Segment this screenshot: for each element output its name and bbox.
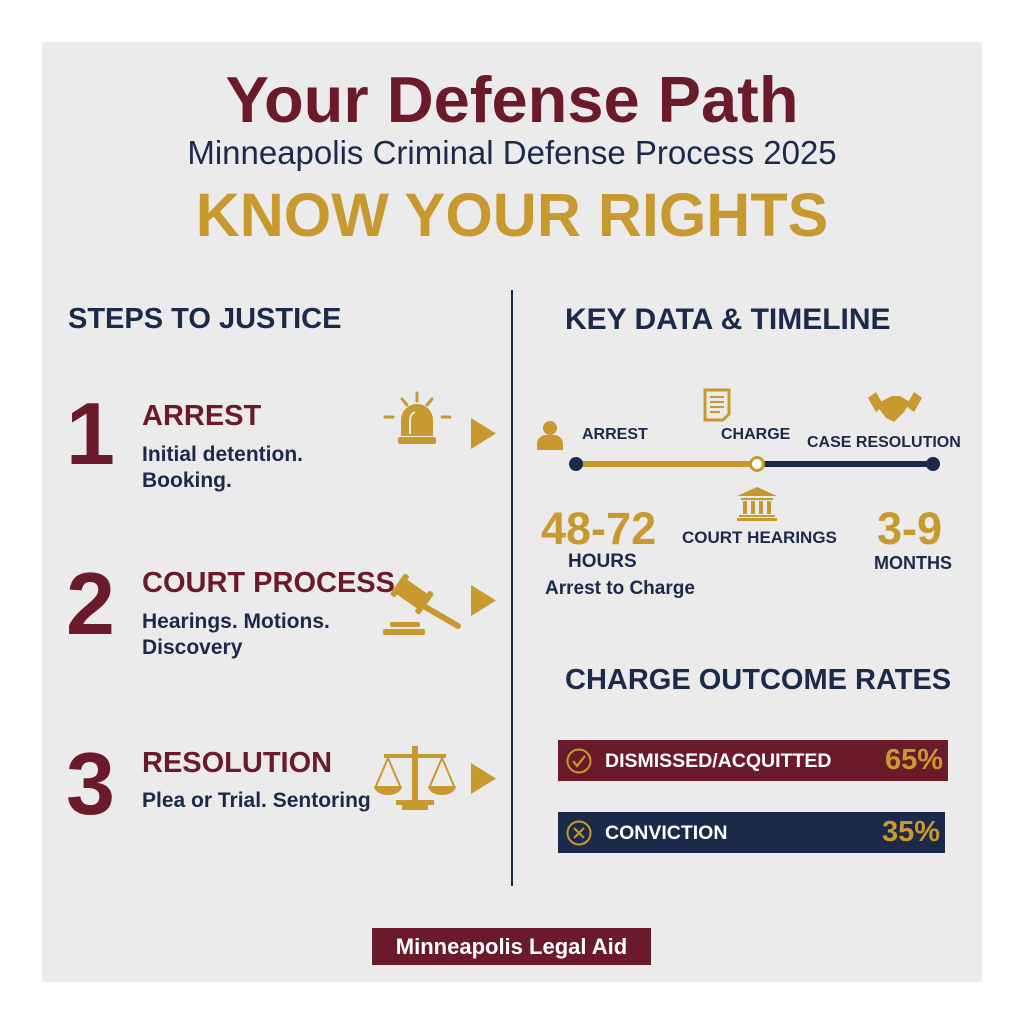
label court hearings: COURT HEARINGS <box>682 528 837 547</box>
step text: Hearings. Motions. <box>142 610 330 633</box>
heading: key data: KEY DATA & TIMELINE <box>565 303 891 336</box>
icon: person <box>537 421 563 450</box>
icon: siren <box>384 392 452 444</box>
heading: steps to justice: STEPS TO JUSTICE <box>68 303 341 335</box>
icon: courthouse <box>737 487 777 521</box>
step text <box>142 610 330 659</box>
bar: dismissed: 65% <box>885 744 943 776</box>
arrow 2 <box>471 585 496 616</box>
number 2: 2 <box>66 554 115 653</box>
timeline: Arrest to Charge <box>545 578 695 599</box>
bar: dismissed: DISMISSED/ACQUITTED <box>605 750 831 772</box>
label case resolution: CASE RESOLUTION <box>807 434 961 451</box>
bar: conviction: 35% <box>882 816 940 848</box>
icon: document <box>704 388 730 422</box>
label arrest: ARREST <box>582 426 648 443</box>
timeline <box>537 388 961 599</box>
step text: Plea or Trial. Sentoring <box>142 789 371 812</box>
number 1: 1 <box>66 384 115 483</box>
icon: handshake <box>868 392 922 422</box>
label charge: CHARGE <box>721 426 790 443</box>
subtitle: Minneapolis Criminal Defense Process 2025 <box>187 134 837 171</box>
icon: gavel <box>383 574 461 635</box>
arrow 3 <box>471 763 496 794</box>
divider <box>511 290 513 886</box>
footer <box>372 928 651 965</box>
step title: COURT PROCESS <box>142 567 395 599</box>
stat 3-9 months: 3-9 <box>877 503 942 554</box>
step text <box>142 443 303 492</box>
step text: Discovery <box>142 636 242 659</box>
stat 48-72 hours: 48-72 <box>541 503 656 554</box>
timeline: MONTHS <box>874 553 952 573</box>
timeline bar <box>576 461 757 467</box>
step 3 <box>66 734 371 833</box>
step 2 <box>66 554 395 659</box>
timeline: HOURS <box>568 551 637 572</box>
heading: charge outcome rates: CHARGE OUTCOME RATES <box>565 664 951 696</box>
bar: conviction <box>558 812 945 853</box>
step title: RESOLUTION <box>142 747 332 779</box>
icon: scales <box>374 746 456 810</box>
title: Your Defense Path <box>225 63 799 136</box>
step title: ARREST <box>142 400 261 432</box>
bar: conviction: CONVICTION <box>605 822 727 844</box>
step text: Booking. <box>142 469 232 492</box>
tagline: KNOW YOUR RIGHTS <box>196 181 828 249</box>
bar: dismissed <box>558 740 948 781</box>
step 1 <box>66 384 303 492</box>
footer: Minneapolis Legal Aid <box>396 934 627 959</box>
arrow 1 <box>471 418 496 449</box>
step text: Initial detention. <box>142 443 303 466</box>
number 3: 3 <box>66 734 115 833</box>
